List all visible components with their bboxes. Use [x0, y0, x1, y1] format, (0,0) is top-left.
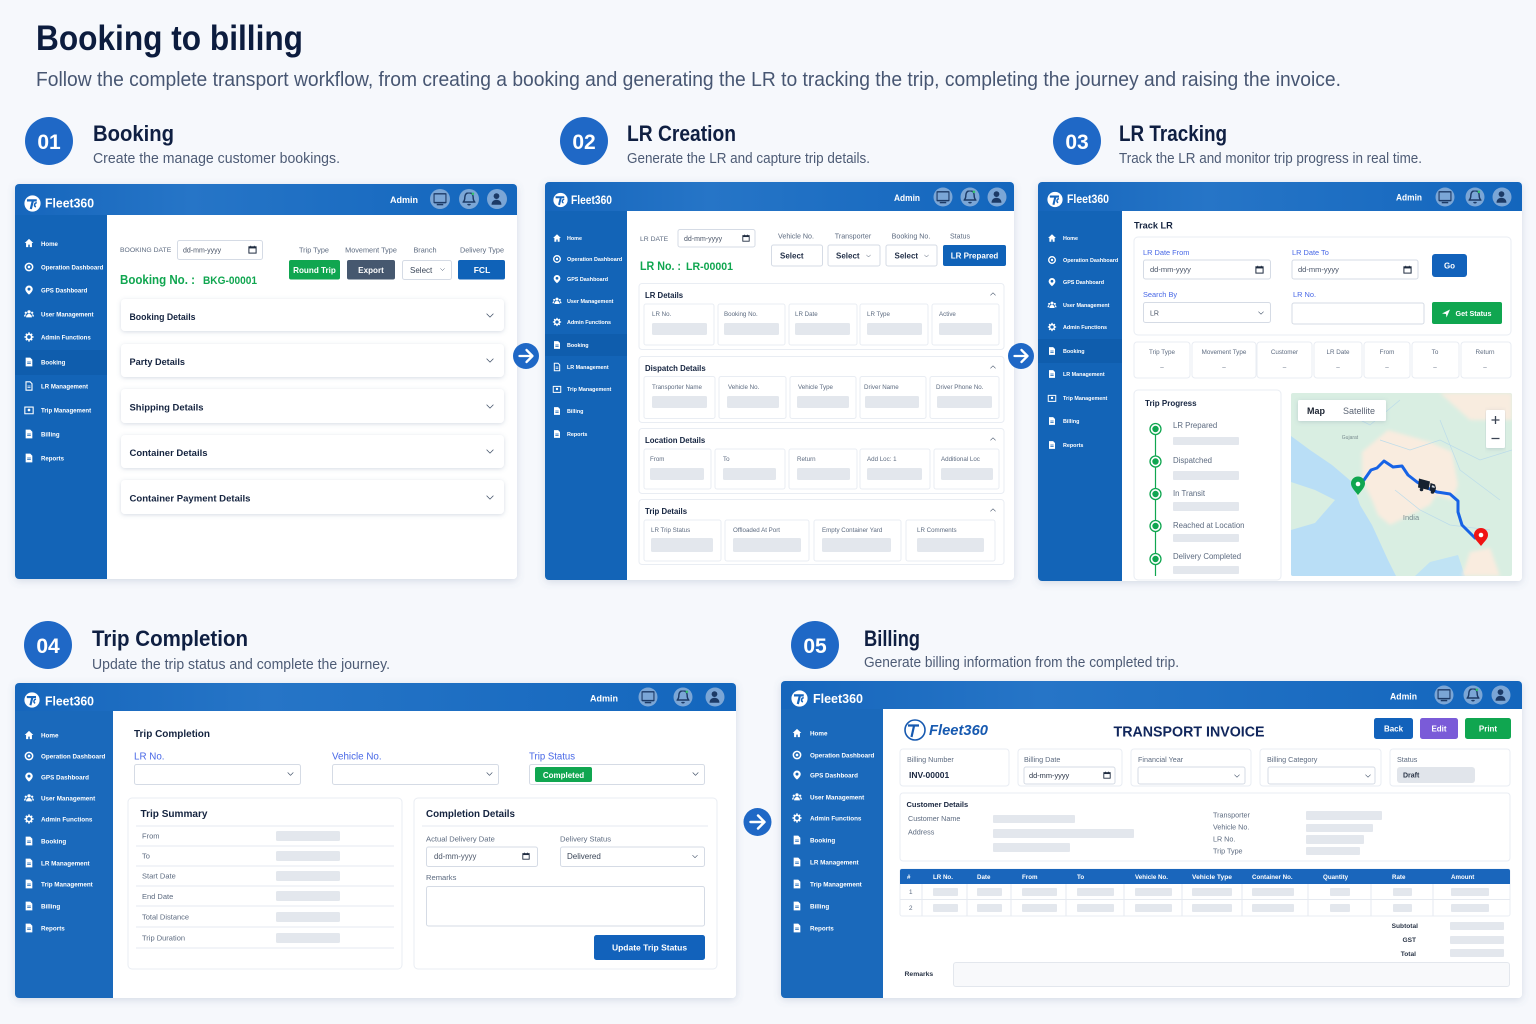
step 04 heading: Trip Completion: [92, 626, 248, 651]
section: dispatch details: Driver Name: [864, 384, 899, 391]
map: destination pin: [1474, 528, 1488, 546]
action buttons: Back: [1384, 724, 1404, 734]
trip progress timeline: In Transit: [1173, 489, 1206, 498]
sidebar: Admin Functions: [567, 320, 611, 326]
top bar: [15, 184, 517, 215]
top filters: [134, 752, 704, 784]
trip info cards: –: [1385, 364, 1389, 371]
filter labels and buttons: [289, 246, 505, 280]
trip info cards: –: [1336, 364, 1340, 371]
step 04 heading: [24, 621, 390, 673]
accordion: container details: [121, 435, 504, 468]
trip summary card: Trip Summary: [140, 809, 208, 820]
top bar: Fleet360: [813, 691, 863, 706]
step 02 heading: LR Creation: [627, 121, 736, 146]
section: location details: From: [650, 456, 664, 463]
sidebar: Billing: [41, 904, 60, 910]
panel: LR tracking screen: [1038, 182, 1522, 581]
section: LR details: LR Date: [795, 311, 818, 318]
panel frame: [545, 182, 1014, 580]
sidebar: Admin Functions: [41, 816, 93, 824]
section: trip details: Offloaded At Port: [733, 527, 780, 534]
sidebar: [545, 211, 627, 580]
completion details card: Delivery Status: [560, 834, 611, 844]
map: truck: [1418, 478, 1436, 494]
map: [1291, 393, 1512, 576]
LR date field: [640, 230, 755, 247]
sidebar: GPS Dashboard: [1063, 280, 1104, 286]
map: sea: [1291, 436, 1396, 576]
sidebar: Trip Management: [41, 408, 91, 414]
sidebar: GPS Dashboard: [41, 774, 89, 782]
customer details: Trip Type: [1213, 846, 1243, 856]
completion details card: Actual Delivery Date: [426, 834, 495, 844]
panel: booking screen: [15, 184, 517, 579]
section: LR details: LR No.: [652, 311, 672, 318]
step 03 heading: Track the LR and monitor trip progress in real time.: [1119, 151, 1422, 167]
section: trip details: LR Trip Status: [651, 527, 690, 534]
accordion: booking details: [121, 299, 504, 331]
completion details card: Remarks: [426, 873, 457, 882]
panel: LR creation screen: [545, 182, 1014, 580]
panel: billing screen: [781, 681, 1522, 998]
filter labels and buttons: Branch: [413, 246, 437, 254]
filter labels and buttons: Export: [358, 266, 384, 275]
LR date field: LR DATE: [640, 236, 669, 243]
top bar: Fleet360: [45, 694, 94, 708]
search filter box: dd-mm-yyyy: [1150, 265, 1191, 274]
booking number: Booking No. :: [120, 272, 195, 287]
line items table: Rate: [1392, 874, 1406, 881]
invoice field cards: dd-mm-yyyy: [1029, 771, 1070, 780]
line items table: Amount: [1451, 874, 1474, 881]
sidebar: User Management: [41, 312, 94, 318]
map type control: Map: [1307, 406, 1326, 416]
completion details card: Update Trip Status: [612, 942, 687, 952]
sidebar: Home: [567, 236, 582, 242]
section: dispatch details: Vehicle Type: [798, 384, 834, 391]
map: northern tint: [1440, 393, 1512, 420]
totals: Total: [1401, 951, 1416, 958]
accordion: container payment details: Container Payment Details: [130, 494, 250, 504]
invoice field cards: Billing Number: [907, 755, 954, 764]
sidebar: Home: [810, 730, 828, 738]
LR date field: dd-mm-yyyy: [684, 236, 723, 243]
customer details: Customer Name: [908, 814, 960, 823]
trip info cards: To: [1432, 349, 1439, 356]
sidebar: Operation Dashboard: [41, 264, 104, 272]
section: trip details: Empty Container Yard: [822, 527, 883, 534]
search filter box: LR Date To: [1292, 248, 1329, 257]
trip info cards: –: [1222, 364, 1226, 371]
section: LR details: Active: [939, 311, 956, 318]
trip summary card: [128, 798, 402, 969]
title: Booking to billing: [36, 19, 303, 58]
main content: [113, 711, 736, 998]
top bar: [781, 681, 1522, 709]
filter labels and buttons: Transporter: [835, 232, 872, 240]
totals: [1392, 922, 1504, 958]
trip info cards: –: [1433, 364, 1437, 371]
invoice field cards: [900, 749, 1510, 786]
step 01 heading: [25, 117, 340, 167]
trip info cards: [1134, 342, 1511, 378]
section: LR details: LR Type: [867, 311, 890, 318]
step 02 heading: 02: [572, 131, 596, 154]
sidebar: Booking: [41, 838, 66, 846]
sidebar: Home: [1063, 236, 1078, 242]
map type control: Satellite: [1343, 406, 1375, 416]
step 05 heading: Billing: [864, 626, 920, 651]
map: land tint: [1362, 430, 1458, 525]
line items table: 1: [909, 889, 913, 896]
section: LR details: [639, 284, 1004, 350]
line items table: Vehicle Type: [1192, 874, 1233, 881]
top filters: LR No.: [134, 752, 164, 762]
arrow: trip completion to billing: [744, 808, 772, 836]
sidebar: Billing: [1063, 419, 1079, 425]
sidebar: LR Management: [41, 384, 88, 390]
filter labels and buttons: [772, 232, 1006, 266]
arrow: LR creation to tracking: [1008, 343, 1034, 369]
search filter box: Go: [1444, 262, 1455, 270]
map: India: [1403, 513, 1420, 522]
trip info cards: Movement Type: [1202, 349, 1247, 356]
filter labels and buttons: Select: [780, 252, 804, 260]
section: location details: Add Loc: 1: [867, 456, 897, 463]
trip progress timeline: Trip Progress: [1145, 399, 1197, 408]
main content: [107, 215, 517, 579]
sidebar: Home: [41, 241, 59, 248]
trip info cards: Return: [1476, 349, 1495, 356]
sidebar: GPS Dashboard: [41, 288, 88, 294]
search filter box: Search By: [1143, 290, 1177, 299]
top bar: [15, 683, 736, 711]
accordion: party details: [121, 344, 504, 377]
invoice field cards: Billing Date: [1024, 755, 1060, 764]
line items table: To: [1077, 874, 1084, 881]
line items table: Container No.: [1252, 874, 1293, 881]
step 03 heading: 03: [1065, 131, 1089, 154]
booking number: BKG-00001: [203, 275, 257, 287]
LR number: LR-00001: [686, 261, 733, 273]
invoice field cards: Billing Category: [1267, 755, 1318, 764]
remarks: Remarks: [904, 971, 933, 978]
customer details: LR No.: [1213, 834, 1235, 844]
trip summary card: Start Date: [142, 872, 176, 880]
sidebar: Billing: [567, 409, 583, 415]
top filters: Vehicle No.: [332, 752, 382, 762]
heading: track LR: Track LR: [1134, 220, 1173, 230]
remarks: [904, 962, 1510, 986]
sidebar: Trip Management: [810, 882, 863, 888]
line items table: Quantity: [1323, 874, 1349, 881]
step 01 heading: Create the manage customer bookings.: [93, 151, 340, 167]
sidebar: User Management: [1063, 303, 1110, 309]
search filter box: LR Date From: [1143, 248, 1189, 257]
customer details: Transporter: [1213, 810, 1250, 820]
section: LR details: LR Details: [645, 291, 684, 300]
section: trip details: Trip Details: [645, 507, 688, 516]
sidebar: User Management: [567, 299, 614, 305]
line items table: Date: [977, 874, 991, 881]
sidebar: Billing: [810, 904, 829, 910]
sidebar: Operation Dashboard: [810, 752, 875, 760]
top bar: Admin: [894, 193, 920, 203]
sidebar: Operation Dashboard: [41, 754, 106, 760]
invoice title: TRANSPORT INVOICE: [1114, 724, 1265, 740]
trip summary card: Total Distance: [142, 912, 189, 922]
accordion: party details: Party Details: [130, 357, 185, 368]
sidebar: GPS Dashboard: [810, 772, 858, 780]
filter labels and buttons: Round Trip: [293, 266, 336, 275]
section: location details: Additional Loc: [941, 456, 980, 463]
sidebar: [15, 711, 113, 998]
map: peninsula: [1291, 482, 1335, 530]
step 05 heading: [791, 621, 1179, 671]
map: southern sea: [1415, 555, 1465, 576]
section: dispatch details: Transporter Name: [652, 384, 703, 391]
sidebar: Reports: [810, 926, 834, 932]
sidebar: Booking: [567, 343, 589, 349]
filter labels and buttons: FCL: [474, 265, 490, 275]
invoice field cards: Financial Year: [1138, 755, 1184, 764]
top filters: Completed: [543, 771, 584, 780]
step 01 heading: Booking: [93, 121, 174, 146]
sidebar: Billing: [41, 432, 60, 438]
completion details card: Completion Details: [426, 809, 515, 820]
trip summary card: Trip Duration: [142, 934, 185, 942]
step 01 heading: 01: [37, 131, 61, 154]
section: dispatch details: [639, 356, 1004, 422]
sidebar: [781, 709, 883, 998]
invoice field cards: Status: [1397, 755, 1418, 764]
trip summary card: From: [142, 832, 160, 840]
filter labels and buttons: Vehicle No.: [778, 232, 814, 240]
customer details: Address: [908, 828, 935, 836]
trip progress timeline: Reached at Location: [1173, 521, 1245, 530]
totals: GST: [1402, 937, 1416, 944]
accordion: container details: Container Details: [130, 448, 208, 459]
sidebar: Booking: [1063, 349, 1085, 355]
section: location details: Return: [797, 456, 816, 463]
top bar: Fleet360: [571, 195, 612, 207]
sidebar: LR Management: [1063, 372, 1105, 378]
step 02 heading: Generate the LR and capture trip details.: [627, 151, 870, 167]
top bar: Admin: [1396, 192, 1422, 202]
top bar: Fleet360: [1067, 194, 1109, 206]
step 04 heading: 04: [36, 635, 60, 658]
trip progress timeline: Dispatched: [1173, 456, 1212, 465]
trip info cards: –: [1483, 364, 1487, 371]
trip info cards: LR Date: [1326, 349, 1350, 356]
trip summary card: To: [142, 852, 150, 860]
step 04 heading: Update the trip status and complete the journey.: [92, 657, 390, 673]
section: location details: To: [723, 456, 730, 463]
top bar: Admin: [1390, 692, 1417, 702]
filter labels and buttons: Movement Type: [345, 246, 397, 254]
completion details card: [414, 798, 717, 969]
sidebar: Admin Functions: [810, 816, 862, 822]
top bar: [1038, 182, 1522, 211]
subtitle: Follow the complete transport workflow, from creating a booking and generating the LR to tracking the trip, completing the journey and raising the invoice.: [36, 68, 1341, 91]
sidebar: Home: [41, 732, 59, 740]
filter labels and buttons: Delivery Type: [460, 246, 504, 254]
trip info cards: Trip Type: [1149, 349, 1175, 356]
search filter box: [1134, 237, 1511, 335]
main content: [1122, 211, 1522, 581]
trip summary card: End Date: [142, 892, 173, 901]
LR number: [640, 261, 733, 273]
trip info cards: –: [1160, 364, 1164, 371]
filter labels and buttons: Status: [950, 232, 971, 240]
trip info cards: –: [1283, 364, 1287, 371]
sidebar: LR Management: [567, 365, 609, 371]
search filter box: LR: [1150, 310, 1159, 318]
trip progress timeline: Delivery Completed: [1173, 552, 1241, 561]
map type control: [1298, 400, 1386, 421]
sidebar: LR Management: [41, 860, 91, 868]
line items table: 2: [909, 905, 913, 912]
sidebar: GPS Dashboard: [567, 277, 608, 283]
panel frame: [15, 683, 736, 998]
filter labels and buttons: Select: [836, 252, 860, 260]
top bar: Admin: [590, 694, 618, 704]
filter labels and buttons: Booking No.: [892, 232, 930, 240]
sidebar: Reports: [1063, 443, 1083, 449]
sidebar: Trip Management: [41, 882, 94, 888]
top filters: Trip Status: [529, 752, 575, 762]
main content: [627, 211, 1014, 580]
totals: Subtotal: [1392, 923, 1418, 930]
panel frame: [15, 184, 517, 579]
section: trip details: [639, 500, 1004, 564]
customer details: Vehicle No.: [1213, 822, 1249, 832]
map: southeast land: [1462, 548, 1500, 576]
customer details: Customer Details: [906, 800, 968, 809]
section: trip details: LR Comments: [917, 527, 957, 534]
sidebar: Admin Functions: [41, 334, 91, 342]
step 02 heading: [560, 117, 870, 167]
section: location details: Location Details: [645, 436, 706, 445]
map: rivers: [1362, 400, 1512, 530]
search filter box: dd-mm-yyyy: [1298, 265, 1339, 274]
booking number: [120, 272, 257, 287]
top bar: Fleet360: [45, 196, 94, 210]
line items table: #: [907, 874, 911, 881]
invoice logo: [905, 720, 989, 740]
line items table: LR No.: [933, 874, 953, 881]
accordion: shipping details: [121, 389, 504, 423]
section: location details: [639, 428, 1004, 494]
search filter box: LR No.: [1293, 290, 1316, 299]
panel frame: [781, 681, 1522, 998]
search filter box: Get Status: [1456, 309, 1491, 318]
booking date field: dd-mm-yyyy: [183, 248, 222, 254]
sidebar: Booking: [810, 838, 835, 844]
sidebar: Reports: [41, 456, 65, 462]
step 03 heading: [1053, 117, 1422, 167]
arrow: booking to LR creation: [513, 343, 539, 369]
main content: [883, 709, 1522, 998]
accordion: shipping details: Shipping Details: [130, 402, 204, 414]
customer details: [900, 793, 1510, 861]
trip info cards: From: [1380, 349, 1394, 356]
filter labels and buttons: Trip Type: [299, 246, 329, 254]
sidebar: Admin Functions: [1063, 325, 1107, 331]
sidebar: User Management: [810, 794, 865, 802]
map: route: [1364, 461, 1475, 538]
trip progress timeline: [1134, 390, 1281, 580]
sidebar: Reports: [41, 926, 65, 932]
line items table: Vehicle No.: [1135, 874, 1168, 881]
LR number: LR No. :: [640, 261, 681, 273]
section: dispatch details: Driver Phone No.: [936, 384, 984, 391]
section: dispatch details: Dispatch Details: [645, 364, 706, 373]
completion details card: dd-mm-yyyy: [434, 852, 477, 861]
accordion: booking details: Booking Details: [130, 312, 196, 323]
map: Gujarat: [1342, 435, 1359, 441]
sidebar: [15, 215, 107, 579]
trip info cards: Customer: [1271, 349, 1298, 356]
top bar: [545, 182, 1014, 211]
step 05 heading: 05: [803, 635, 827, 658]
line items table: [900, 869, 1510, 916]
top bar: Admin: [390, 195, 418, 206]
sidebar: Operation Dashboard: [1063, 258, 1118, 264]
accordion: container payment details: [121, 480, 504, 514]
panel frame: [1038, 182, 1522, 581]
panel: trip completion screen: [15, 683, 736, 998]
sidebar: [1038, 211, 1122, 581]
map: origin pin: [1351, 477, 1365, 495]
filter labels and buttons: Select: [894, 252, 918, 260]
step 03 heading: LR Tracking: [1119, 121, 1227, 146]
section: LR details: Booking No.: [724, 311, 758, 318]
trip progress timeline: LR Prepared: [1173, 421, 1217, 430]
action buttons: Edit: [1431, 724, 1447, 734]
sidebar: Trip Management: [1063, 396, 1108, 402]
filter labels and buttons: Select: [410, 266, 433, 275]
booking date field: [120, 240, 262, 260]
invoice field cards: INV-00001: [909, 770, 949, 780]
invoice field cards: Draft: [1403, 772, 1420, 780]
sidebar: Trip Management: [567, 387, 612, 393]
action buttons: [1374, 718, 1511, 739]
sidebar: Operation Dashboard: [567, 257, 622, 263]
step 05 heading: Generate billing information from the completed trip.: [864, 655, 1179, 671]
sidebar: User Management: [41, 796, 96, 802]
section: dispatch details: Vehicle No.: [728, 384, 760, 391]
invoice logo: Fleet360: [929, 722, 989, 739]
filter labels and buttons: LR Prepared: [951, 252, 998, 260]
sidebar: LR Management: [810, 860, 860, 866]
booking date field: BOOKING DATE: [120, 247, 172, 254]
line items table: From: [1022, 874, 1038, 881]
action buttons: Print: [1479, 724, 1497, 734]
sidebar: Reports: [567, 432, 587, 438]
sidebar: Booking: [41, 360, 66, 366]
heading: trip completion: Trip Completion: [134, 728, 210, 740]
map zoom control: [1486, 410, 1505, 448]
completion details card: Delivered: [567, 852, 601, 861]
